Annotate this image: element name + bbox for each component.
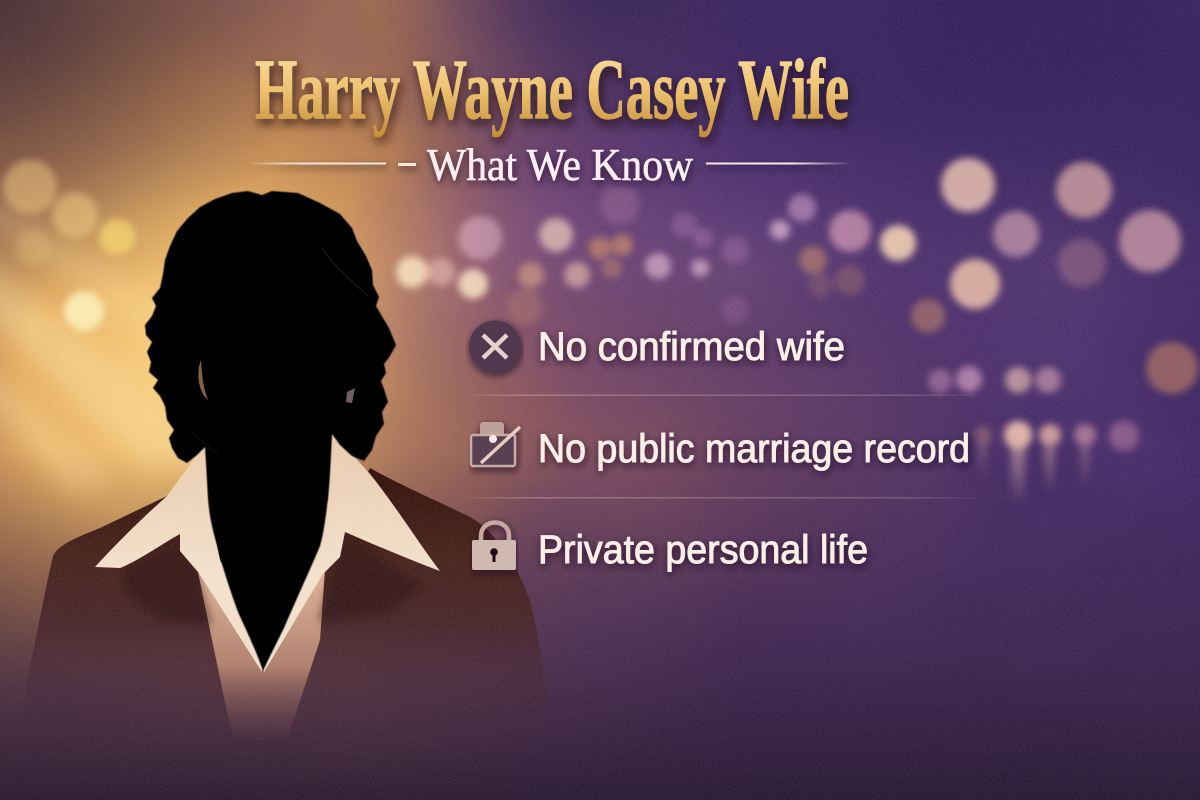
subtitle with flanking rules: What We Know xyxy=(427,140,693,190)
right collar xyxy=(258,433,440,672)
left collar xyxy=(95,444,268,672)
fact: no public marriage record xyxy=(471,422,970,471)
jacket lapels xyxy=(122,535,423,625)
shirt front xyxy=(198,570,325,740)
ear highlights xyxy=(198,360,355,403)
fact: no confirmed wife xyxy=(469,320,845,372)
background: floor reflections xyxy=(978,442,1090,505)
icon: x in circle xyxy=(469,320,521,372)
text: no public marriage record: No public marriage record xyxy=(538,427,970,471)
icon: crossed-out certificate xyxy=(471,422,520,466)
jacket xyxy=(28,468,547,694)
background: bokeh lights xyxy=(3,158,1198,451)
text: private personal life: Private personal life xyxy=(538,528,868,572)
text: no confirmed wife: No confirmed wife xyxy=(538,325,845,369)
figure silhouette: hair and neck xyxy=(145,191,396,671)
figure clothing: jacket, shirt and collar xyxy=(28,434,547,734)
background: spotlight rays xyxy=(0,190,215,490)
row dividers xyxy=(458,394,988,498)
title: Harry Wayne Casey Wife xyxy=(255,41,849,137)
hair strands xyxy=(195,248,368,458)
subtitle with flanking rules xyxy=(248,140,851,190)
icon: padlock xyxy=(472,522,516,570)
fact: private personal life xyxy=(472,522,868,572)
